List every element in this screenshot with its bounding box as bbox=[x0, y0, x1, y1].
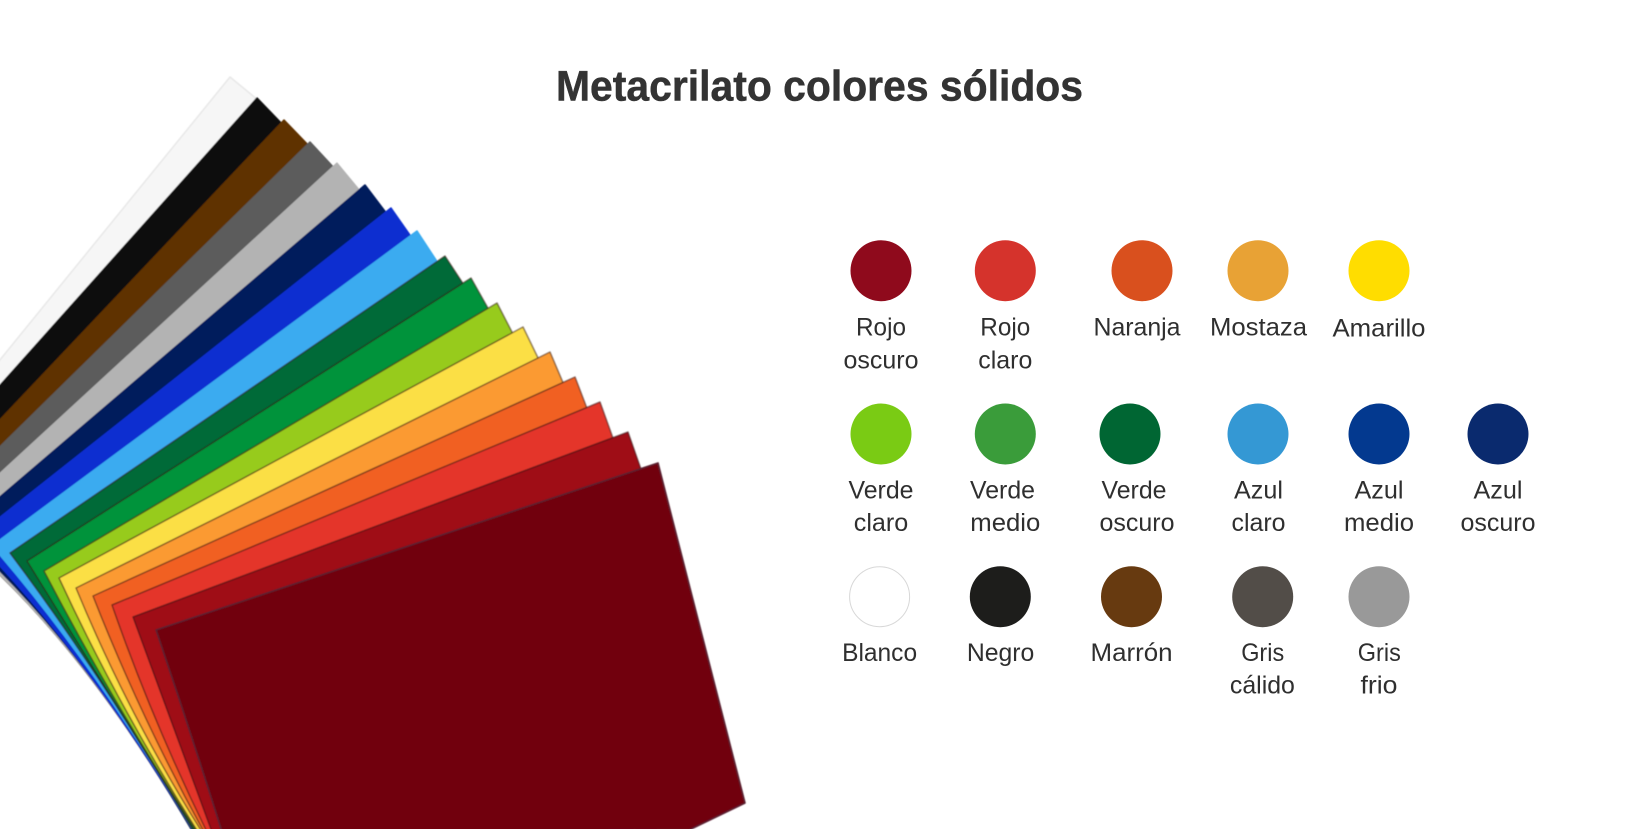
sheet: marrón bbox=[0, 120, 400, 830]
sheet: negro bbox=[0, 98, 400, 830]
sheet: azul medio bbox=[0, 208, 412, 830]
sheet: rojo bbox=[112, 402, 614, 830]
title: Metacrilato colores sólidos bbox=[556, 62, 1083, 110]
sheet: gris oscuro bbox=[0, 142, 400, 830]
swatch: verde claro: claro bbox=[854, 509, 908, 537]
swatch: gris cálido: cálido bbox=[1230, 671, 1295, 699]
sheet: blanco bbox=[0, 77, 400, 830]
sheet: amarillo bbox=[59, 327, 539, 830]
swatch: mostaza bbox=[1210, 240, 1307, 342]
swatch: rojo oscuro bbox=[844, 240, 918, 374]
sheet: verde bbox=[27, 278, 489, 830]
swatch: azul medio: Azul bbox=[1354, 476, 1404, 504]
swatch: azul oscuro: oscuro bbox=[1460, 509, 1536, 537]
swatch: negro: Negro bbox=[967, 639, 1034, 667]
colour legend bbox=[842, 240, 1536, 699]
swatch: verde medio bbox=[970, 404, 1040, 537]
swatch: naranja: Naranja bbox=[1094, 314, 1181, 342]
sheet: naranja claro bbox=[76, 352, 564, 830]
swatch: mostaza: Mostaza bbox=[1210, 314, 1307, 342]
swatch: azul claro bbox=[1228, 404, 1288, 537]
swatch: gris frio: frio bbox=[1360, 671, 1398, 699]
swatch: verde oscuro bbox=[1100, 404, 1174, 537]
swatch: rojo claro: Rojo bbox=[980, 314, 1030, 342]
swatch: rojo oscuro: Rojo bbox=[856, 314, 906, 342]
swatch: verde oscuro: oscuro bbox=[1100, 509, 1174, 537]
swatch: negro bbox=[967, 566, 1034, 667]
swatch: verde medio: Verde bbox=[970, 476, 1035, 504]
swatch: amarillo: Amarillo bbox=[1332, 315, 1426, 343]
sheet: azul oscuro bbox=[0, 185, 400, 830]
swatch: azul claro: Azul bbox=[1234, 476, 1283, 504]
swatch: azul oscuro: Azul bbox=[1474, 476, 1522, 504]
swatch: marrón: Marrón bbox=[1090, 639, 1172, 667]
swatch: gris cálido bbox=[1230, 566, 1295, 699]
sheet: naranja bbox=[93, 377, 588, 830]
swatch: azul medio bbox=[1344, 404, 1414, 537]
swatch: azul medio: medio bbox=[1344, 509, 1414, 537]
swatch: verde oscuro: Verde bbox=[1102, 476, 1166, 504]
sheet: azul claro bbox=[0, 231, 438, 830]
swatch: marrón bbox=[1090, 566, 1172, 667]
swatch: blanco bbox=[842, 567, 917, 667]
fan of acrylic colour sheets bbox=[0, 77, 745, 830]
swatch: gris cálido: Gris bbox=[1241, 639, 1284, 667]
swatch: gris frio: Gris bbox=[1358, 639, 1401, 667]
sheet: verde oscuro bbox=[10, 256, 464, 830]
swatch: rojo oscuro: oscuro bbox=[844, 346, 918, 374]
sheet: rojo oscuro bbox=[133, 432, 642, 830]
swatch: azul oscuro bbox=[1460, 404, 1536, 537]
swatch: gris frio bbox=[1348, 566, 1410, 699]
swatch: naranja bbox=[1094, 240, 1181, 342]
swatch: verde claro bbox=[848, 404, 914, 537]
swatch: rojo claro bbox=[975, 240, 1036, 374]
swatch: azul claro: claro bbox=[1232, 509, 1286, 537]
sheet: granate bbox=[156, 463, 745, 830]
swatch: verde claro: Verde bbox=[848, 476, 914, 504]
sheet: verde lima bbox=[44, 303, 514, 830]
swatch: verde medio: medio bbox=[970, 509, 1040, 537]
swatch: amarillo bbox=[1332, 240, 1426, 343]
swatch: blanco: Blanco bbox=[842, 639, 917, 667]
sheet: gris claro bbox=[0, 163, 400, 830]
swatch: rojo claro: claro bbox=[978, 346, 1032, 374]
